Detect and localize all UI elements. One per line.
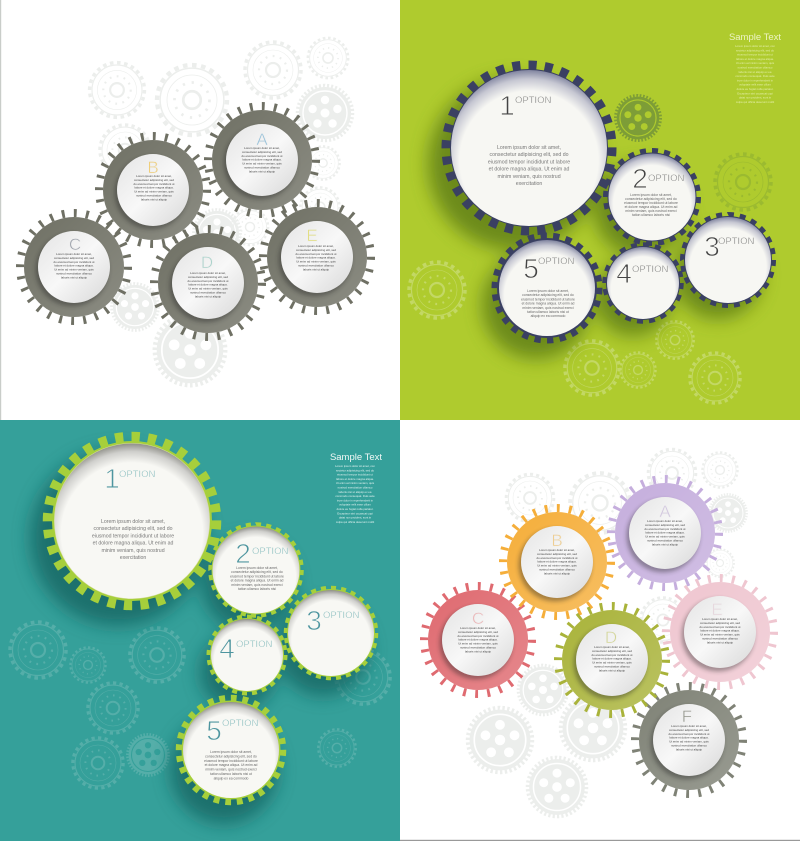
label 2: OPTION — [252, 546, 289, 557]
text block E: do eiusmod tempor incididunt ut — [700, 625, 741, 629]
sample text column: dolore eu fugiat nulla pariatur. — [737, 87, 774, 91]
text block C: Lorem ipsum dolor sit amet, — [56, 252, 92, 256]
body text 1: exercitation — [120, 555, 146, 561]
body text 5: consectetur adipisicing elit, sed do — [522, 293, 574, 297]
text block D: Ut enim ad minim veniam, quis — [188, 287, 228, 291]
label 5 — [523, 253, 575, 284]
gear 2 — [606, 150, 698, 244]
body text 5: minim veniam, quis nostrud exerci — [205, 768, 257, 772]
sample text column: dolore eu fugiat nulla pariatur. — [337, 507, 374, 511]
sample text heading: Sample Text — [330, 452, 382, 463]
label 4: OPTION — [236, 639, 273, 650]
sample text column: irure dolor in reprehenderit in — [337, 498, 373, 502]
text block C: laboris nisi ut aliquip — [465, 649, 491, 653]
text block B: consectetur adipisicing elit, sed — [537, 552, 577, 556]
text block B: labore et dolore magna aliqua. — [537, 560, 577, 564]
sample text column: voluptate velit esse cillum — [739, 83, 772, 87]
body text 5: Lorem ipsum dolor sit amet, — [210, 750, 252, 754]
background gears: light teal — [10, 622, 390, 788]
label 2 — [632, 163, 685, 194]
gear 4 — [604, 244, 682, 322]
text block D: consectetur adipisicing elit, sed — [592, 649, 632, 653]
body text 1: et dolore magna aliqua. Ut enim ad — [93, 541, 173, 547]
body text 2: tation ullamco laboris nisi — [238, 587, 276, 591]
text block B: labore et dolore magna aliqua. — [134, 186, 174, 190]
label 5 — [206, 715, 259, 746]
body text 5: tation ullamco laboris nisi ut — [210, 772, 252, 776]
text block B: Ut enim ad minim veniam, quis — [134, 190, 174, 194]
text block D: laboris nisi ut aliquip — [599, 668, 625, 672]
sample text column: labore et dolore magna aliqua. — [336, 477, 374, 481]
body text 2: Lorem ipsum dolor sit amet, — [236, 566, 278, 570]
sample text column: labore et dolore magna aliqua. — [736, 57, 774, 61]
body text 1: Lorem ipsum dolor sit amet, — [101, 519, 165, 525]
sample text column: sectetur adipisicing elit, sed do — [336, 468, 374, 472]
panel: dark gears on green — [400, 0, 800, 420]
sample text column: culpa qui officia deserunt mollit — [336, 520, 374, 524]
label 1 — [104, 463, 156, 494]
text block B: consectetur adipisicing elit, sed — [134, 178, 174, 182]
gear E — [666, 578, 774, 686]
gear 5 — [494, 236, 600, 340]
text block D: laboris nisi ut aliquip — [195, 294, 221, 298]
sample text column: commodo consequat. Duis aute — [335, 494, 375, 498]
label 3: OPTION — [323, 610, 360, 621]
letter E: E — [306, 226, 318, 245]
gear 4 — [208, 616, 286, 694]
text block B: nostrud exercitation ullamco — [539, 568, 575, 572]
text block A: consectetur adipisicing elit, sed — [645, 523, 685, 527]
letter A: A — [659, 502, 671, 521]
text block B: Lorem ipsum dolor sit amet, — [539, 548, 575, 552]
gear A — [208, 106, 316, 214]
body text 2: consectetur adipisicing elit, sed do — [231, 570, 283, 574]
letter D: D — [201, 253, 213, 272]
background gear: olive ring — [715, 154, 771, 210]
text block A: nostrud exercitation ullamco — [647, 538, 683, 542]
text block E: nostrud exercitation ullamco — [702, 636, 738, 640]
sample text column: nostrud exercitation ullamco — [738, 66, 773, 70]
text block A: Ut enim ad minim veniam, quis — [242, 162, 282, 166]
body text 1: consectetur adipisicing elit, sed do — [93, 526, 173, 532]
text block B: laboris nisi ut aliquip — [141, 197, 167, 201]
text block B: do eiusmod tempor incididunt ut — [537, 556, 578, 560]
label 3 — [306, 605, 360, 636]
gear C — [20, 213, 128, 321]
sample text column: nostrud exercitation ullamco — [338, 486, 373, 490]
text block A: consectetur adipisicing elit, sed — [242, 150, 282, 154]
text block E: Ut enim ad minim veniam, quis — [700, 633, 740, 637]
body text 5: minim veniam, quis nostrud exerci — [522, 306, 574, 310]
text block A: labore et dolore magna aliqua. — [242, 158, 282, 162]
label 1 — [499, 90, 552, 121]
text block A: nostrud exercitation ullamco — [244, 166, 280, 170]
text block F: Ut enim ad minim veniam, quis — [669, 740, 709, 744]
body text 2: eiusmod tempor incididunt ut labore — [624, 201, 678, 205]
body text 1: minim veniam, quis nostrud — [497, 174, 561, 180]
gear 1 — [48, 437, 216, 605]
body text 2: tation ullamco laboris nisi — [632, 213, 670, 217]
text block D: do eiusmod tempor incididunt ut — [188, 279, 229, 283]
gear 5 — [179, 698, 283, 802]
sample text column: Ut enim ad minim veniam, quis — [736, 61, 775, 65]
body text 5: aliquip ex ea commodo — [214, 776, 249, 780]
text block A: labore et dolore magna aliqua. — [645, 531, 685, 535]
body text 1: et dolore magna aliqua. Ut enim ad — [489, 167, 569, 173]
text block C: do eiusmod tempor incididunt ut — [458, 634, 499, 638]
sample text column: Lorem ipsum dolor sit amet, con — [735, 44, 775, 48]
label 2: 2 — [632, 163, 648, 194]
text block B: Lorem ipsum dolor sit amet, — [136, 174, 172, 178]
label 4: 4 — [219, 633, 235, 664]
panel: grey gears on white — [0, 0, 400, 420]
body text 2: eiusmod tempor incididunt ut labore — [230, 574, 284, 578]
gear 3 — [286, 588, 376, 678]
text block C: Lorem ipsum dolor sit amet, — [460, 626, 496, 630]
gear 1 — [446, 65, 612, 231]
text block B: laboris nisi ut aliquip — [544, 571, 570, 575]
body text 5: consectetur adipisicing elit, sed do — [205, 754, 257, 758]
text block F: labore et dolore magna aliqua. — [669, 736, 709, 740]
sample text column: eiusmod tempor incididunt ut — [337, 473, 373, 477]
text block A: laboris nisi ut aliquip — [652, 542, 678, 546]
label 3: 3 — [306, 605, 322, 636]
text block E: laboris nisi ut aliquip — [707, 640, 733, 644]
text block D: labore et dolore magna aliqua. — [592, 657, 632, 661]
body text 5: et dolore magna aliqua. Ut enim ad — [522, 302, 574, 306]
text block A: laboris nisi ut aliquip — [249, 169, 275, 173]
sample text column: datat non proident, sunt in — [339, 516, 372, 520]
text block C: labore et dolore magna aliqua. — [54, 264, 94, 268]
text block D: nostrud exercitation ullamco — [190, 290, 226, 294]
background gear: olive solid — [615, 95, 661, 141]
sample text column: commodo consequat. Duis aute — [735, 74, 775, 78]
body text 1: eiusmod tempor incididunt ut labore — [92, 533, 174, 539]
text block E: nostrud exercitation ullamco — [298, 264, 334, 268]
sample text column: laboris nisi ut aliquip ex ea — [739, 70, 772, 74]
body text 1: eiusmod tempor incididunt ut labore — [488, 159, 570, 165]
label 1: 1 — [104, 463, 120, 494]
gear 3 — [682, 214, 774, 306]
label 4 — [219, 633, 273, 664]
body text 2: et dolore magna aliqua. Ut enim ad — [625, 205, 677, 209]
text block D: Ut enim ad minim veniam, quis — [592, 661, 632, 665]
letter B: B — [147, 158, 159, 177]
gear 2 — [210, 524, 302, 616]
label 1: OPTION — [515, 95, 552, 106]
text block C: consectetur adipisicing elit, sed — [54, 256, 94, 260]
gear B — [503, 508, 611, 616]
body text 5: eiusmod tempor incididunt ut labore — [521, 297, 575, 301]
label 1: OPTION — [119, 469, 156, 480]
text block E: Lorem ipsum dolor sit amet, — [702, 617, 738, 621]
letter E: E — [711, 600, 723, 619]
sample text column: irure dolor in reprehenderit in — [737, 78, 773, 82]
text block F: do eiusmod tempor incididunt ut — [669, 732, 710, 736]
text block F: laboris nisi ut aliquip — [676, 747, 702, 751]
text block C: consectetur adipisicing elit, sed — [458, 630, 498, 634]
text block C: nostrud exercitation ullamco — [56, 272, 92, 276]
label 5: OPTION — [222, 718, 259, 729]
text block E: consectetur adipisicing elit, sed — [296, 248, 336, 252]
text block E: consectetur adipisicing elit, sed — [700, 621, 740, 625]
text block C: nostrud exercitation ullamco — [460, 646, 496, 650]
label 2: OPTION — [648, 173, 685, 184]
gear F — [635, 686, 743, 794]
text block C: labore et dolore magna aliqua. — [458, 638, 498, 642]
body text 2: consectetur adipisicing elit, sed do — [625, 197, 677, 201]
drop shadows — [30, 450, 369, 824]
letter C: C — [472, 609, 484, 628]
text block F: nostrud exercitation ullamco — [671, 744, 707, 748]
panel: colourful gears on white — [400, 420, 800, 841]
body text 5: tation ullamco laboris nisi ut — [527, 310, 569, 314]
sample text column: culpa qui officia deserunt mollit — [736, 100, 774, 104]
gear D — [154, 229, 262, 337]
text block F: Lorem ipsum dolor sit amet, — [671, 724, 707, 728]
body text 5: Lorem ipsum dolor sit amet, — [527, 289, 569, 293]
text block D: labore et dolore magna aliqua. — [188, 283, 228, 287]
label 3 — [704, 231, 755, 262]
label 2 — [235, 538, 289, 569]
body text 1: Lorem ipsum dolor sit amet, — [497, 145, 561, 151]
sample text column: Ut enim ad minim veniam, quis — [336, 481, 375, 485]
text block D: Lorem ipsum dolor sit amet, — [594, 645, 630, 649]
label 5: 5 — [206, 715, 222, 746]
gear B — [99, 136, 207, 244]
sample text column: sectetur adipisicing elit, sed do — [736, 48, 774, 52]
text block A: Lorem ipsum dolor sit amet, — [244, 146, 280, 150]
body text 2: et dolore magna aliqua. Ut enim ad — [231, 579, 283, 583]
body text 2: Lorem ipsum dolor sit amet, — [630, 193, 672, 197]
label 4: 4 — [616, 258, 632, 289]
text block C: Ut enim ad minim veniam, quis — [54, 268, 94, 272]
body text 2: minim veniam, quis nostrud exerci — [231, 583, 283, 587]
gear D — [558, 606, 666, 714]
text block E: do eiusmod tempor incididunt ut — [296, 252, 337, 256]
label 3: OPTION — [718, 236, 755, 247]
label 4: OPTION — [632, 264, 669, 275]
body text 2: minim veniam, quis nostrud exerci — [625, 209, 677, 213]
text block E: Lorem ipsum dolor sit amet, — [298, 244, 334, 248]
text block E: Ut enim ad minim veniam, quis — [296, 260, 336, 264]
text block D: consectetur adipisicing elit, sed — [188, 275, 228, 279]
gear E — [263, 203, 371, 311]
text block E: laboris nisi ut aliquip — [303, 267, 329, 271]
panel: lime gears on teal — [0, 420, 400, 841]
body text 1: minim veniam, quis nostrud — [101, 548, 165, 554]
text block E: labore et dolore magna aliqua. — [296, 256, 336, 260]
sample text heading: Sample Text — [729, 32, 781, 43]
body text 1: exercitation — [516, 181, 542, 187]
background gears: pale grey — [90, 38, 352, 385]
sample text column: Lorem ipsum dolor sit amet, con — [335, 464, 375, 468]
text block C: do eiusmod tempor incididunt ut — [54, 260, 95, 264]
body text 1: consectetur adipisicing elit, sed do — [489, 152, 569, 158]
text block C: laboris nisi ut aliquip — [61, 275, 87, 279]
label 1: 1 — [499, 90, 515, 121]
body text 5: aliquip ex ea commodo — [531, 314, 566, 318]
background gears: pale grey — [468, 449, 747, 816]
text block D: do eiusmod tempor incididunt ut — [592, 653, 633, 657]
sample text column: datat non proident, sunt in — [739, 96, 772, 100]
gear C — [424, 586, 532, 694]
sample text column: Excepteur sint occaecat cupi — [337, 511, 373, 515]
text block A: Ut enim ad minim veniam, quis — [645, 535, 685, 539]
label 4 — [616, 258, 669, 289]
body text 5: et dolore magna aliqua. Ut enim ad — [205, 763, 257, 767]
label 3: 3 — [704, 231, 720, 262]
letter B: B — [551, 531, 563, 550]
label 5: OPTION — [538, 256, 575, 267]
sample text column: eiusmod tempor incididunt ut — [737, 53, 773, 57]
text block A: Lorem ipsum dolor sit amet, — [647, 519, 683, 523]
letter D: D — [605, 628, 617, 647]
background gears: light green — [409, 262, 740, 403]
drop shadows — [428, 78, 762, 359]
label 2: 2 — [235, 538, 251, 569]
text block E: labore et dolore magna aliqua. — [700, 629, 740, 633]
text block D: Lorem ipsum dolor sit amet, — [190, 271, 226, 275]
letter C: C — [69, 235, 81, 254]
text block C: Ut enim ad minim veniam, quis — [458, 642, 498, 646]
sample text column: Excepteur sint occaecat cupi — [737, 91, 773, 95]
text block F: consectetur adipisicing elit, sed — [669, 728, 709, 732]
letter F: F — [682, 707, 692, 726]
text block A: do eiusmod tempor incididunt ut — [645, 527, 686, 531]
text block B: Ut enim ad minim veniam, quis — [537, 564, 577, 568]
text block B: do eiusmod tempor incididunt ut — [134, 182, 175, 186]
text block A: do eiusmod tempor incididunt ut — [242, 154, 283, 158]
text block D: nostrud exercitation ullamco — [594, 664, 630, 668]
gear A — [611, 479, 719, 587]
body text 5: eiusmod tempor incididunt ut labore — [204, 759, 258, 763]
text block B: nostrud exercitation ullamco — [136, 194, 172, 198]
letter A: A — [256, 130, 268, 149]
sample text column: laboris nisi ut aliquip ex ea — [339, 490, 372, 494]
sample text column: voluptate velit esse cillum — [339, 503, 372, 507]
label 5: 5 — [523, 253, 539, 284]
